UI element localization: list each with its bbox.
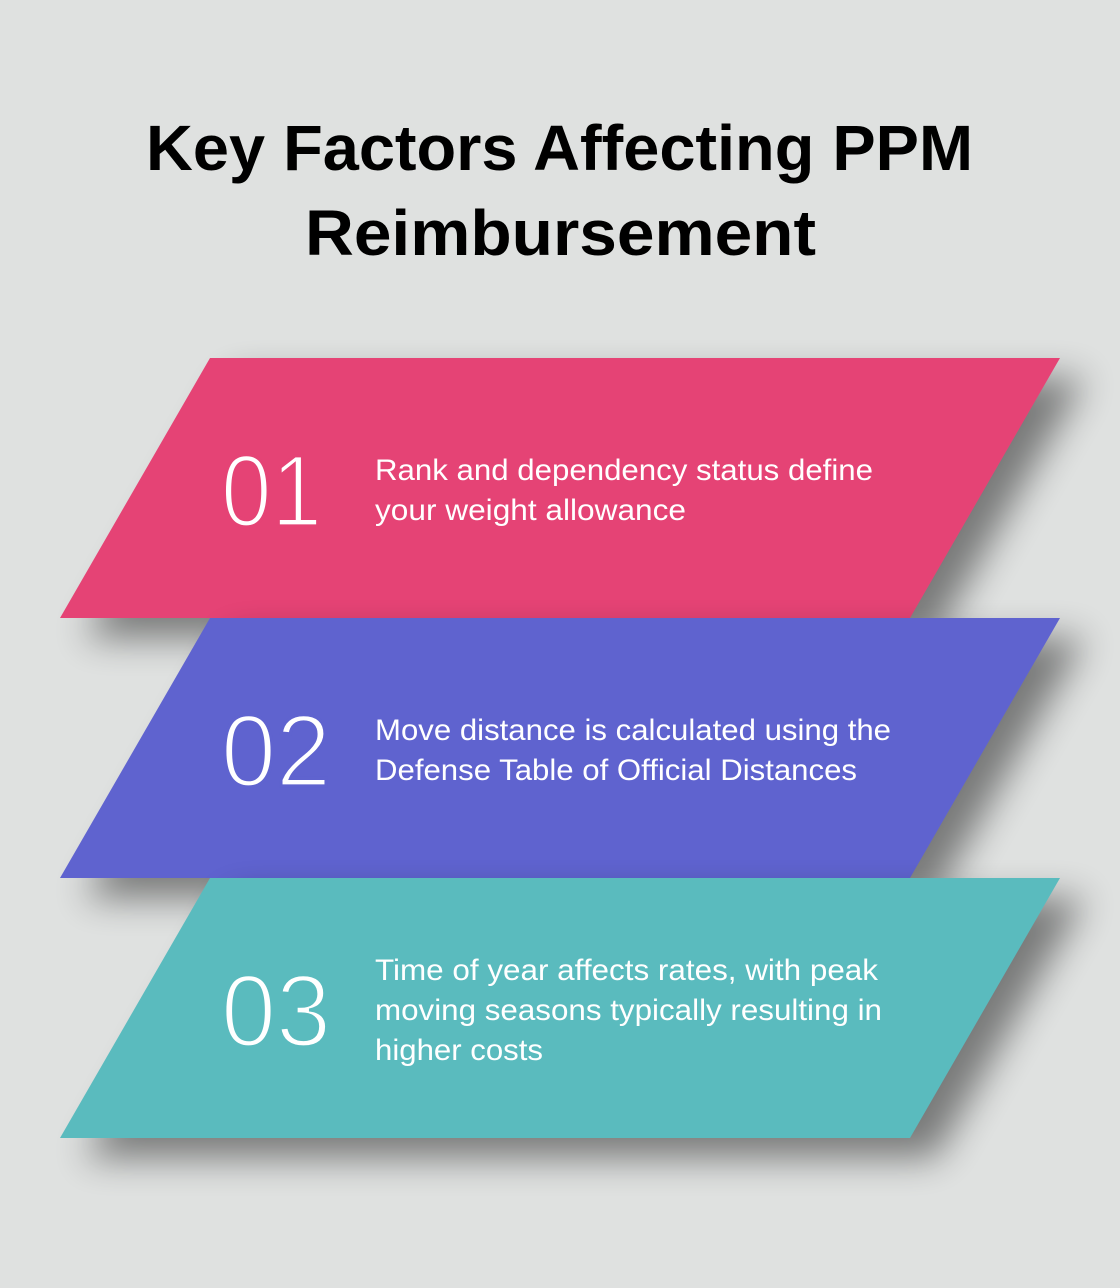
number: 02: 02 (221, 694, 331, 808)
text: factor 03: moving seasons typically resulting in (375, 994, 882, 1027)
text: factor 01: Rank and dependency status define (375, 454, 873, 487)
number: 01: 01 (221, 434, 322, 548)
text: factor 02 (375, 714, 891, 787)
text: factor 03 (375, 954, 882, 1067)
text: factor 03: Time of year affects rates, with peak (375, 954, 879, 987)
parallelogram: factor 02 (60, 618, 1060, 878)
title: Key Factors Affecting PPM (146, 112, 973, 184)
text: factor 02: Defense Table of Official Distances (375, 754, 857, 787)
panel: factor 02 (60, 618, 1060, 878)
text: factor 03: higher costs (375, 1034, 543, 1067)
text: factor 02: Move distance is calculated using the (375, 714, 891, 747)
panel: factor 01 (60, 358, 1060, 618)
title (146, 112, 973, 269)
title: Reimbursement (305, 197, 816, 269)
panel: factor 03 (60, 878, 1060, 1138)
parallelogram: factor 01 (60, 358, 1060, 618)
text: factor 01: your weight allowance (375, 494, 686, 527)
number: 03: 03 (221, 954, 331, 1068)
parallelogram: factor 03 (60, 878, 1060, 1138)
text: factor 01 (375, 454, 873, 527)
